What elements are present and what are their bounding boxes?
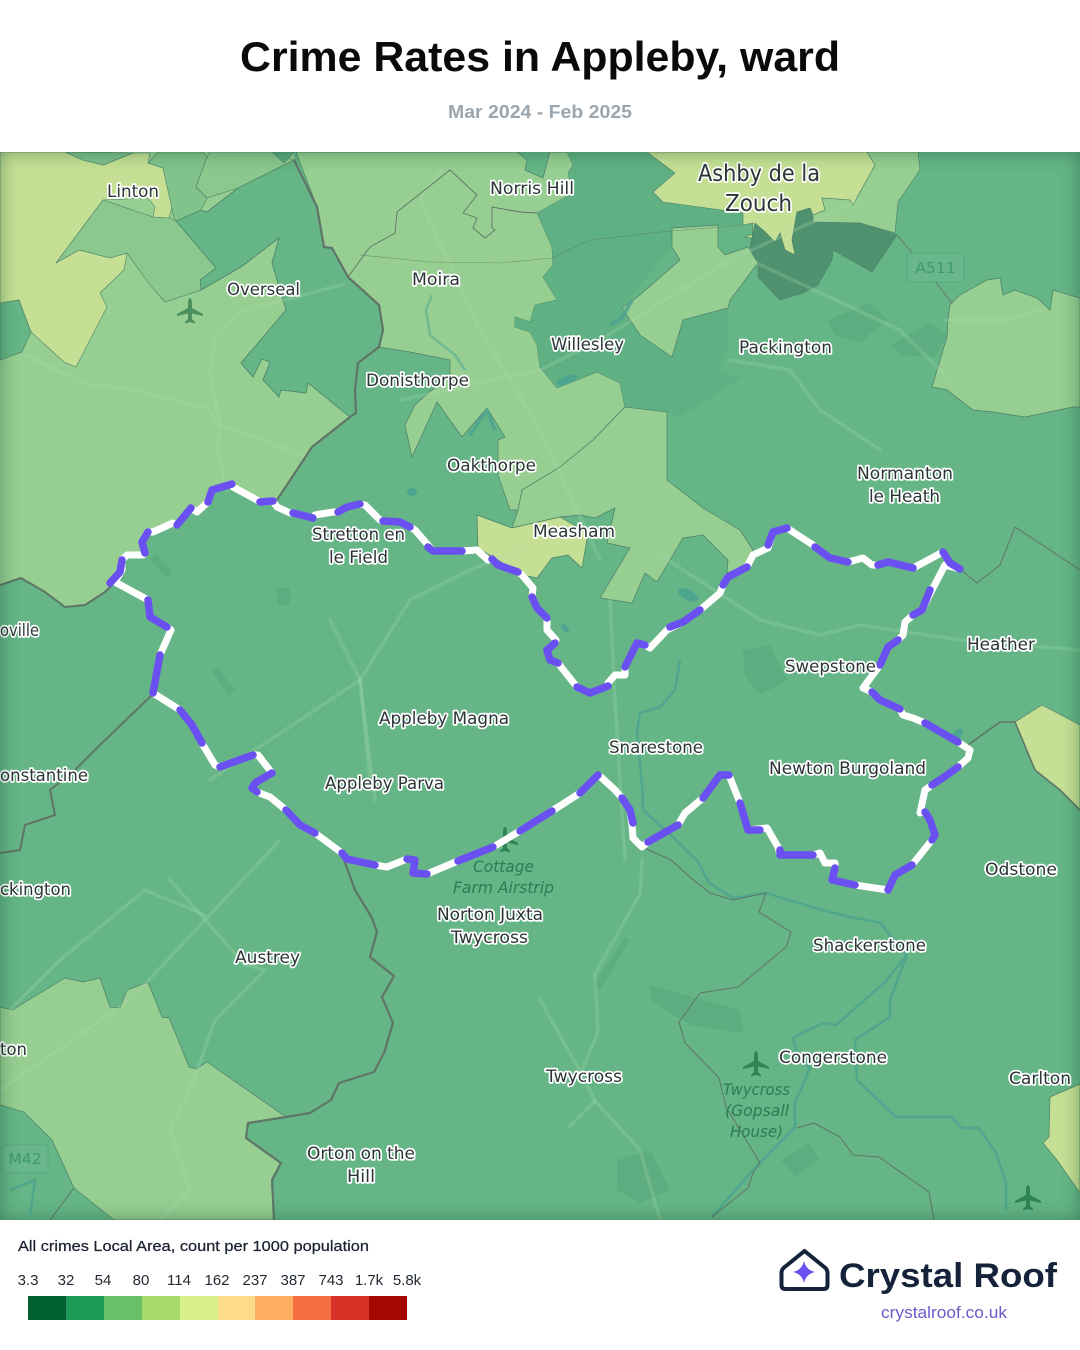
airfield labels: Cottage: [473, 857, 534, 876]
areas: south-west light green: [0, 978, 286, 1220]
place labels: le Field: [329, 548, 388, 568]
airfield labels: [453, 857, 790, 1141]
place labels: oville: [0, 621, 39, 641]
roads: [0, 170, 1080, 1220]
legend scale labels: 80: [133, 1272, 149, 1289]
legend scale labels: 54: [95, 1272, 111, 1289]
airfield labels: Farm Airstrip: [453, 878, 554, 897]
place labels: Moira: [412, 270, 460, 290]
areas: Packington west light green: [622, 225, 758, 357]
place labels: Twycross: [450, 928, 528, 948]
place labels: Orton on the: [307, 1144, 415, 1164]
place labels: onstantine: [0, 766, 88, 786]
place labels: Austrey: [235, 948, 300, 968]
airfield labels: (Gopsall: [725, 1101, 790, 1120]
areas: light green left: [0, 152, 383, 607]
place labels: Norris Hill: [490, 179, 574, 199]
legend scale labels: [18, 1272, 422, 1289]
map: crime rate choropleth: [0, 152, 1080, 1220]
areas: Measham light green: [512, 407, 753, 603]
place labels: Norton Juxta: [437, 905, 543, 925]
areas: Moira and Oakthorpe light green: [296, 152, 625, 510]
place labels: Appleby Magna: [379, 709, 509, 729]
areas: Linton yellow-green: [0, 152, 174, 367]
place labels: Willesley: [551, 335, 624, 355]
icon: airfield plane south-east: [1015, 1185, 1041, 1210]
place labels: le Heath: [869, 487, 940, 507]
legend title: All crimes Local Area, count per 1000 population: [18, 1238, 369, 1255]
place labels: ckington: [0, 880, 71, 900]
place labels: Twycross: [545, 1067, 622, 1087]
areas: Ashby dark green: [750, 208, 897, 300]
legend scale labels: 1.7k: [355, 1272, 384, 1289]
legend scale labels: 32: [58, 1272, 74, 1289]
legend scale labels: 237: [242, 1272, 268, 1289]
place labels: Snarestone: [609, 738, 703, 758]
icon: airfield plane Twycross: [743, 1051, 769, 1076]
map edge shading: [0, 152, 1080, 1220]
place labels: Heather: [967, 635, 1035, 655]
areas: eastern light green patch: [932, 278, 1080, 417]
road sign: A511: A511: [915, 259, 956, 277]
place labels: Carlton: [1009, 1069, 1071, 1089]
place labels: Ashby de la: [698, 161, 820, 187]
place labels: ton: [0, 1040, 27, 1060]
legend scale labels: 114: [167, 1272, 191, 1289]
areas: Linton south light: [56, 200, 216, 302]
logo wordmark: Crystal Roof: [839, 1257, 1058, 1295]
ward boundary: Appleby: [110, 484, 970, 890]
areas: top strip patches: [0, 152, 294, 360]
place labels: Packington: [739, 338, 832, 358]
areas: Willesley darker green: [515, 152, 626, 407]
areas: east yellow-green patches: [1015, 705, 1080, 1193]
place labels: Odstone: [985, 860, 1057, 880]
logo: Crystal Roof: [782, 1251, 1058, 1295]
rivers: [10, 295, 1006, 1217]
place labels: Hill: [347, 1167, 375, 1187]
road sign: A511: [907, 253, 964, 282]
place labels: Zouch: [725, 191, 792, 217]
place labels: Linton: [107, 182, 159, 202]
place labels: Normanton: [857, 464, 953, 484]
legend colour scale: [28, 1296, 407, 1320]
icon: house with star: [782, 1251, 828, 1289]
legend scale labels: 743: [318, 1272, 344, 1289]
legend scale labels: 162: [204, 1272, 230, 1289]
place labels: Swepstone: [785, 657, 876, 677]
place labels: Stretton en: [312, 525, 405, 545]
title: Crime Rates in Appleby, ward: [240, 33, 840, 80]
place labels: Shackerstone: [813, 936, 926, 956]
icon: airport plane Overseal: [177, 298, 203, 324]
website address: crystalroof.co.uk: [881, 1304, 1008, 1322]
road sign: M42: M42: [8, 1150, 42, 1168]
icon: airfield plane Cottage Farm: [492, 827, 518, 852]
place labels: Congerstone: [779, 1048, 887, 1068]
airfield labels: House): [730, 1122, 783, 1141]
place labels: Measham: [533, 522, 615, 542]
road sign: M42: [2, 1145, 48, 1173]
place labels: Oakthorpe: [447, 456, 536, 476]
areas: Measham yellow-green: [477, 515, 588, 578]
areas: light patch east of Ashby: [813, 152, 920, 233]
place labels: Appleby Parva: [325, 774, 444, 794]
legend scale labels: 5.8k: [393, 1272, 422, 1289]
areas: Overseal mid green: [176, 160, 383, 417]
legend scale labels: 387: [280, 1272, 306, 1289]
boundary lines: [0, 160, 1080, 1220]
place labels: Overseal: [227, 280, 300, 300]
place labels: Newton Burgoland: [769, 759, 926, 779]
airfield labels: Twycross: [723, 1080, 790, 1099]
ponds: [407, 372, 965, 744]
place labels: Donisthorpe: [366, 371, 469, 391]
place labels: [0, 161, 1071, 1187]
areas: Ashby yellow-green: [647, 152, 875, 255]
subtitle: date range: Mar 2024 - Feb 2025: [448, 101, 632, 122]
legend scale labels: 3.3: [18, 1272, 38, 1289]
